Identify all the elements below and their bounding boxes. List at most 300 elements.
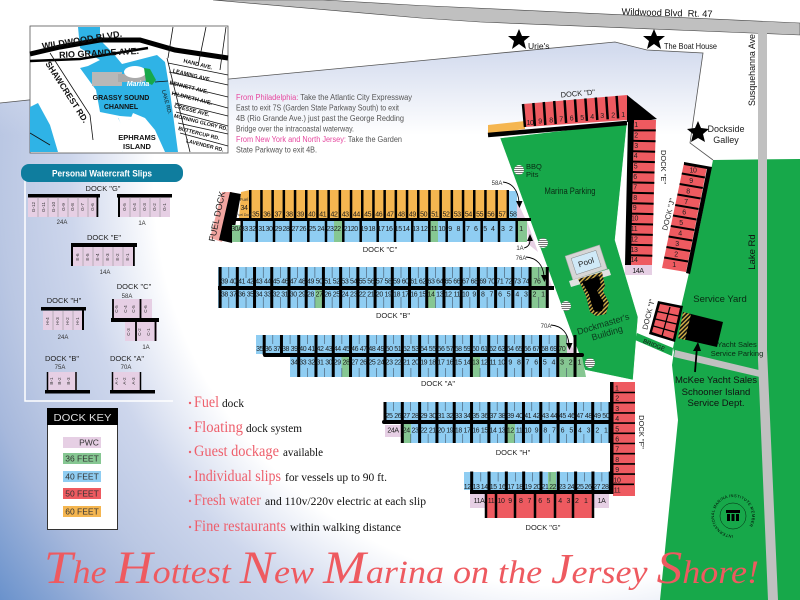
dock E: 8 — [633, 195, 637, 202]
dock J: 2 — [674, 252, 678, 258]
dock B: 16 — [410, 292, 418, 298]
pwc dock G left: 24A — [57, 220, 67, 226]
dock C: 1 — [519, 226, 523, 233]
dock C — [231, 190, 531, 254]
pwc dock G right: G-5 — [122, 203, 127, 211]
dock C: 13 — [412, 226, 420, 233]
dock H: 3 — [587, 428, 591, 434]
pwc dock E: E-2 — [115, 253, 120, 261]
pwc dock A: A-2 — [122, 377, 127, 385]
dock B: 26 — [324, 292, 332, 298]
dock F: 4 — [615, 416, 619, 423]
dock C: 25 — [309, 226, 316, 233]
key: 50 feet: 50 FEET — [65, 488, 99, 498]
dockmaster's building — [569, 269, 631, 343]
dock D: DOCK "D" — [560, 87, 596, 99]
dock B: 25 — [333, 292, 340, 298]
inset: street labels: SHAWCREST RD. — [43, 59, 91, 125]
dock D: 10 — [526, 120, 534, 127]
pwc dock E: DOCK "E" — [87, 233, 121, 242]
dock H: 25 — [386, 413, 393, 420]
dock A: 49 — [377, 346, 384, 353]
pwc dock G left: G-6 — [90, 203, 95, 211]
key: 36 feet: 36 FEET — [65, 454, 99, 464]
dock G: 25 — [576, 484, 584, 491]
heading: personal watercraft slips — [21, 164, 183, 182]
dock C: 41 — [319, 212, 327, 218]
dock H: 15 — [481, 428, 488, 434]
feature: individual slips: Individual slips — [194, 468, 281, 485]
star: Dockside Galley: Dockside — [707, 124, 745, 134]
feature: individual slips — [189, 468, 387, 485]
heading: personal watercraft slips: Personal Watercraft Slips — [52, 168, 152, 180]
key: PWC: PWC — [79, 438, 99, 448]
dock B: 24 — [341, 292, 349, 298]
dock C: 45 — [364, 212, 372, 218]
pwc dock H: H-2 — [65, 317, 70, 325]
dock B: 9 — [472, 292, 476, 298]
dock F — [610, 382, 646, 496]
dock B: 23 — [350, 292, 357, 298]
dock E — [625, 120, 668, 275]
arrow: 58A — [492, 181, 522, 208]
dock A: 11 — [490, 360, 497, 366]
dock H: 39 — [507, 413, 514, 420]
dock H: 34 — [464, 413, 471, 420]
pwc dock C — [111, 282, 159, 351]
dock B: 51 — [324, 278, 332, 286]
dock B: 45 — [273, 278, 280, 286]
dock G: 4 — [558, 498, 562, 505]
dock A: 68 — [541, 346, 549, 353]
dock A: 55 — [429, 346, 436, 353]
pwc dock G left: G-7 — [80, 203, 85, 211]
dock A: 30 — [325, 360, 333, 366]
dock C: 27 — [292, 226, 299, 233]
dock H: 42 — [533, 413, 540, 420]
dock A: 62 — [489, 346, 497, 353]
dock B: 62 — [419, 278, 426, 286]
dock C: 43 — [342, 212, 349, 218]
dock H: 11 — [516, 428, 523, 434]
pwc dock G left: DOCK "G" — [86, 184, 121, 193]
dock A — [256, 335, 586, 388]
pwc dock G left: G-8 — [70, 203, 75, 211]
inset: street labels: GRASSY SOUND — [93, 95, 149, 102]
dock H: 29 — [420, 413, 428, 420]
dock G: 8 — [519, 498, 523, 505]
feature: guest dockage: Guest dockage — [194, 443, 279, 460]
dock C: 30A — [231, 226, 243, 233]
star: The Boat House: The Boat House — [664, 41, 717, 51]
pwc dock B: DOCK "B" — [45, 354, 79, 363]
dock H — [382, 402, 612, 457]
pwc dock A: A-3 — [131, 377, 136, 385]
feature: fresh water — [189, 492, 426, 509]
pwc dock B — [45, 354, 90, 394]
BBQ pits — [514, 162, 542, 179]
pwc dock C: 58A — [122, 294, 132, 300]
dock H: 50 — [602, 413, 610, 420]
dock A: 5 — [543, 360, 547, 366]
dock D: 2 — [611, 112, 615, 120]
dock J: 5 — [679, 220, 683, 227]
pwc dock B: B-1 — [49, 377, 54, 385]
dock C: 18 — [368, 226, 376, 233]
dock J: 9 — [689, 178, 693, 185]
dock C: Fuel — [240, 197, 248, 202]
dock D: 1 — [621, 112, 625, 119]
dock F: 2 — [615, 396, 619, 403]
dock B: 19 — [384, 292, 392, 298]
dock B: 41 — [238, 278, 246, 286]
pwc dock C: C-1 — [146, 328, 151, 336]
arrow: 76A — [516, 256, 548, 282]
dock A: 25 — [368, 360, 376, 366]
label: yacht sales service parking — [711, 340, 763, 358]
dock C: 44 — [353, 212, 360, 218]
dock G: 18 — [516, 484, 523, 491]
dock B: 68 — [471, 278, 478, 286]
fuel dock — [207, 190, 241, 243]
dock J: DOCK "J" — [660, 197, 677, 231]
dock B: 56 — [367, 278, 375, 286]
dock D: 8 — [549, 118, 553, 124]
dock E: 14 — [630, 257, 638, 264]
dock A: 44 — [334, 346, 341, 353]
dock G: 21 — [542, 484, 549, 491]
pwc dock C: DOCK "C" — [117, 282, 152, 291]
dock I — [640, 298, 683, 342]
dock A: 60 — [472, 346, 479, 353]
dock H: 44 — [550, 413, 558, 420]
dock G: 16 — [498, 484, 506, 491]
feature: guest dockage: available — [283, 447, 323, 459]
dock C: 51 — [431, 212, 439, 218]
pwc dock B: B-2 — [57, 377, 62, 385]
dock J: 8 — [686, 188, 690, 196]
dock G: 17 — [507, 484, 515, 491]
inset: street labels: RIO GRANDE AVE. — [59, 46, 139, 60]
dock A: 63 — [498, 346, 505, 353]
dock A: 9 — [508, 360, 512, 366]
dock D: 9 — [538, 118, 542, 126]
dock A: 53 — [412, 346, 419, 353]
star: The Boat House — [643, 29, 717, 51]
dock C: 3 — [501, 226, 505, 233]
dock G: 1A — [598, 498, 606, 505]
pwc dock C: C-2 — [137, 328, 142, 336]
directions text block — [236, 93, 412, 154]
dock B: 14 — [428, 292, 435, 298]
dock G: 5 — [547, 498, 551, 505]
arrow: 76A: 76A — [516, 256, 526, 262]
dock C: 2 — [509, 226, 513, 233]
dock A: 54 — [420, 346, 428, 353]
pwc dock E: 14A — [100, 270, 110, 276]
inset: marina logo — [92, 66, 156, 88]
dock C: 26 — [299, 226, 307, 233]
label: McKee Yacht Sales with arrow: Service Dept. — [687, 398, 745, 409]
dock H: 18 — [455, 428, 462, 434]
dock C: 30 — [266, 226, 273, 233]
dock C: 28 — [282, 226, 290, 233]
dock H: 21 — [429, 428, 436, 434]
dock A: 26 — [360, 360, 367, 366]
dock C: 57 — [498, 212, 506, 218]
dock A: 58 — [455, 346, 462, 353]
dock B: 21 — [367, 292, 375, 298]
directions text block: East to exit 7S (Garden State Parkway South) to exit — [236, 104, 400, 112]
dock G: 11A — [474, 498, 485, 505]
inset: street labels: BENNETT AVE. — [169, 80, 209, 96]
feature: fuel dock: Fuel — [194, 394, 219, 411]
dock D: 5 — [580, 115, 584, 122]
road: service road — [674, 350, 764, 378]
dock B: 4 — [515, 292, 519, 298]
dock A: 38 — [282, 346, 289, 353]
dock H: 1 — [604, 428, 608, 434]
inset: street labels: LAVENDER RD. — [185, 138, 225, 154]
dock G: 10 — [498, 498, 505, 505]
star: Urie's — [508, 29, 549, 51]
dock B: 15 — [419, 292, 426, 298]
dock C: 52 — [442, 212, 450, 218]
pwc dock G right: G-3 — [142, 203, 147, 211]
road: Wildwood Blvd Rt. 47 — [213, 0, 800, 35]
dock H: 43 — [542, 413, 549, 420]
dock H: 32 — [446, 413, 454, 420]
dock J: 3 — [675, 241, 679, 248]
dock A: 31 — [316, 360, 324, 366]
dock A: 1 — [577, 360, 581, 366]
road label: Lake Rd: Lake Rd — [747, 234, 758, 270]
dock C: 37 — [274, 212, 282, 218]
dock G: 24 — [567, 484, 575, 491]
dock C: 9 — [448, 226, 452, 233]
pwc dock H: 24A — [58, 335, 68, 341]
inset: street labels: LEAMING AVE. — [172, 68, 212, 84]
dock C: 58 — [510, 212, 517, 218]
dock G: 2 — [575, 498, 579, 505]
dock D: 4 — [590, 114, 594, 121]
dock F: 5 — [615, 426, 619, 433]
dock H: DOCK "H" — [496, 448, 531, 457]
dock H: 37 — [490, 413, 497, 420]
land: marina parking — [500, 123, 638, 380]
dock C: 6 — [474, 226, 478, 233]
dockmaster's building: Building — [590, 324, 624, 343]
dock G: 11 — [488, 498, 495, 505]
dock A: 17 — [438, 360, 445, 366]
dock B: 39 — [221, 278, 228, 286]
pool: Pool — [577, 256, 595, 269]
feature: fine restaurants — [189, 518, 401, 535]
dock B: 8 — [481, 292, 485, 298]
pwc dock G right: G-4 — [132, 203, 137, 211]
dock H: 12 — [507, 428, 514, 434]
dock B: 18 — [393, 292, 401, 298]
dock C: 23 — [326, 226, 334, 233]
pwc dock A: A-1 — [114, 377, 119, 385]
dock E: 5 — [634, 164, 638, 171]
dock A: 16 — [446, 360, 454, 366]
dock A: 7 — [526, 360, 530, 366]
dock C: 55 — [476, 212, 484, 218]
pink PWC wedges along parking — [517, 201, 576, 353]
pwc dock E: E-5 — [85, 253, 90, 261]
dock H: 35 — [472, 413, 480, 420]
service building: McKee Yacht Sales — [678, 312, 723, 347]
dock J: 1 — [672, 262, 676, 269]
dock F: 9 — [615, 467, 619, 474]
dock A: 22 — [394, 360, 402, 366]
dock G: 3 — [567, 498, 571, 505]
dock E: 4 — [634, 153, 638, 160]
pwc dock G right: 1A — [138, 221, 146, 227]
dock A: 50 — [386, 346, 393, 353]
label: marina parking: Marina Parking — [544, 186, 596, 197]
dock C: 56 — [487, 212, 495, 218]
feature: floating dock system — [189, 419, 302, 436]
dock H: 49 — [594, 413, 601, 420]
dock A: 23 — [386, 360, 393, 366]
feature: fine restaurants: Fine restaurants — [194, 518, 286, 535]
dock B: 59 — [393, 278, 401, 286]
dock A: 33 — [299, 360, 307, 366]
dock B: 58 — [384, 278, 392, 286]
dock A: 35 — [256, 346, 264, 353]
pwc dock C: C-5 — [114, 305, 119, 313]
dock C: 34 — [240, 205, 248, 212]
dock F: 11 — [614, 488, 621, 494]
dock C: DOCK "C" — [363, 245, 398, 254]
dock H: 4 — [578, 428, 582, 434]
dock B: 27 — [316, 292, 323, 298]
dock H: 46 — [568, 413, 575, 420]
dock B: 20 — [376, 292, 383, 298]
arrow: 58A: 58A — [492, 181, 502, 187]
dock H: 7 — [552, 428, 556, 434]
dock E: 6 — [633, 174, 637, 181]
BBQ pits: BBQ — [526, 162, 542, 171]
label: yacht sales service parking: Yacht Sales — [717, 340, 757, 349]
dock C: 53 — [454, 212, 461, 218]
inset: street labels: CRESSE AVE. — [173, 104, 211, 118]
dock A: 65 — [515, 346, 523, 353]
dock A: 47 — [360, 346, 367, 353]
dock B: 30 — [290, 292, 297, 298]
inset locator map — [30, 26, 229, 154]
directions text block: State Parkway to exit 4B. — [236, 146, 317, 154]
feature: floating dock system: dock system — [246, 423, 302, 435]
dock C: 10 — [438, 226, 446, 233]
dock J: 4 — [678, 230, 682, 238]
inset: street labels: CHANNEL — [104, 104, 139, 111]
dock E: 12 — [630, 236, 638, 243]
land: Lake Rd and service yard — [660, 159, 800, 600]
dock B: 74 — [522, 278, 530, 286]
pool — [565, 245, 607, 280]
dock A: 46 — [351, 346, 359, 353]
dock C: 5 — [483, 226, 487, 233]
dock A: 6 — [534, 360, 538, 366]
dock B: 12 — [445, 292, 452, 298]
dock B: 73 — [514, 278, 521, 286]
dock A: 70 — [558, 346, 566, 353]
pwc dock G right: G-2 — [152, 203, 157, 211]
dock A: 43 — [325, 346, 333, 353]
dock A: 61 — [481, 346, 488, 353]
dock B: 31 — [281, 292, 289, 298]
dock B — [218, 267, 554, 320]
inset: street labels — [41, 29, 229, 154]
dock B: 1 — [541, 292, 545, 298]
dock B: 11 — [454, 292, 461, 298]
dock C: 22 — [334, 226, 341, 233]
directions text block: 4B (Rio Grande Ave.) just past the George Redding — [236, 114, 404, 123]
inset: street labels: MORNING GLORY RD. — [173, 113, 229, 133]
dock G: 6 — [538, 498, 542, 505]
dock C: 31 — [258, 226, 266, 233]
pwc dock H: H-3 — [55, 317, 60, 325]
pwc dock A: 70A — [121, 365, 131, 371]
arrow: 70A: 70A — [541, 324, 551, 330]
dock G: 7 — [528, 498, 532, 505]
panel: dock key: DOCK KEY — [54, 412, 112, 424]
dock C: 54 — [465, 212, 472, 218]
dock A: 10 — [498, 360, 505, 366]
dock J: 10 — [690, 168, 697, 174]
pwc dock C: 1A — [142, 345, 150, 351]
dock H: 33 — [455, 413, 462, 420]
dock A: 64 — [507, 346, 514, 353]
dock C: 29 — [275, 226, 282, 233]
dock B: 50 — [316, 278, 323, 286]
dock G: 28 — [602, 484, 609, 491]
dock B: 17 — [402, 292, 409, 298]
pwc dock E — [71, 233, 137, 276]
feature list — [189, 394, 426, 535]
dock A: 3 — [560, 360, 564, 366]
dock B: 55 — [359, 278, 366, 286]
International Marina Institute logo: INTERNATIONAL MARINA INSTITUTE MEMBER — [711, 494, 755, 538]
dock C: 14 — [402, 226, 410, 233]
dock H: 45 — [559, 413, 566, 420]
dock C: 20 — [351, 226, 358, 233]
label: McKee Yacht Sales with arrow — [675, 342, 757, 409]
dock C: 46 — [375, 212, 383, 218]
inset: street labels: HILDRETH AVE. — [171, 91, 213, 107]
dock B: 10 — [462, 292, 469, 298]
dock H: 41 — [524, 413, 532, 420]
dock B: 33 — [264, 292, 271, 298]
dock B: 70 — [488, 278, 495, 286]
dock A: 8 — [517, 360, 521, 366]
dock B: 61 — [410, 278, 418, 286]
dock C: 19 — [360, 226, 368, 233]
dock B: 42 — [247, 278, 254, 286]
dock A: 40 — [299, 346, 307, 353]
dock E: 14A — [632, 268, 644, 275]
dock A: 39 — [291, 346, 298, 353]
dock G: 22 — [549, 484, 557, 491]
pwc dock G left — [28, 184, 121, 226]
bridge — [635, 333, 673, 356]
dock B: 49 — [307, 278, 314, 286]
dock C: 11 — [431, 226, 438, 233]
pwc dock C: C-4 — [123, 305, 128, 313]
